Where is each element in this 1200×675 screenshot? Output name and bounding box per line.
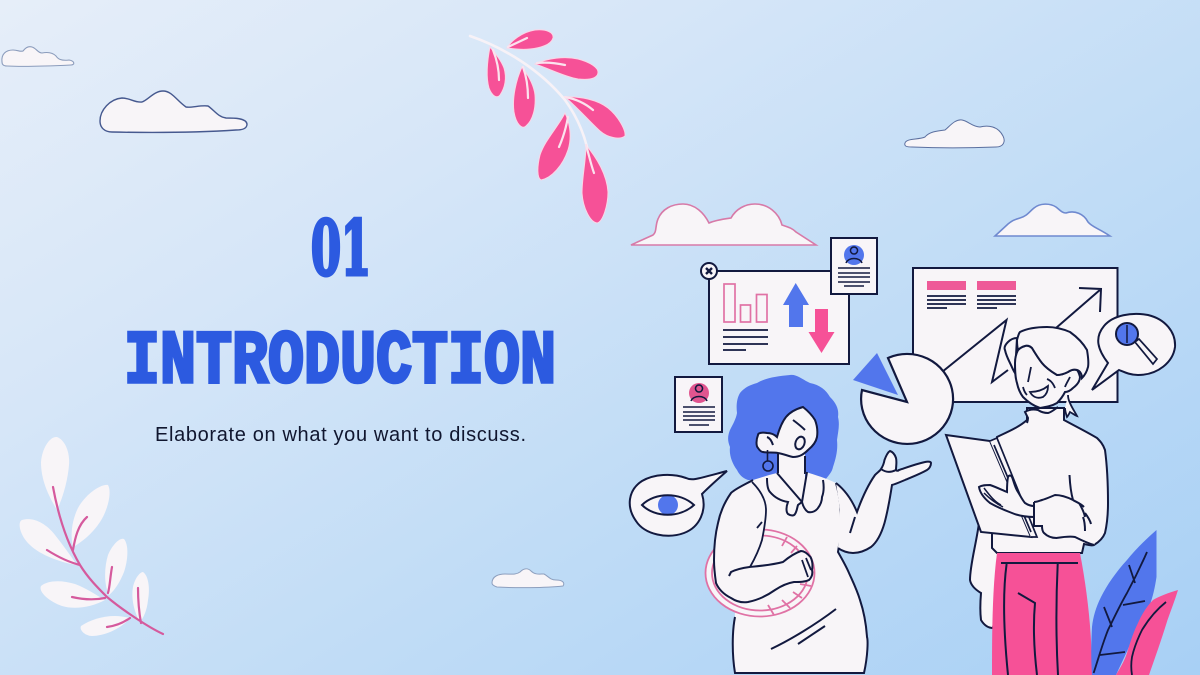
book — [946, 435, 1031, 537]
left hair tuft — [1005, 338, 1017, 373]
raised arm and hand — [836, 451, 931, 553]
panel: growth chart card — [913, 268, 1118, 402]
person: woman — [706, 375, 931, 673]
cloud: large top left — [100, 91, 247, 132]
collar — [1025, 407, 1058, 423]
back arm — [970, 520, 1005, 628]
growth arrow — [942, 288, 1101, 382]
arm with fist — [714, 480, 812, 602]
pants — [992, 553, 1092, 675]
head — [1015, 346, 1080, 408]
arrow down — [808, 309, 834, 353]
plant: pink leaf — [1116, 590, 1178, 675]
cloud: small top left — [2, 47, 74, 66]
close button — [701, 263, 717, 279]
speech bubble: eye — [630, 471, 727, 536]
neck and face — [777, 450, 805, 502]
bars — [724, 284, 767, 322]
section number: 01 — [311, 204, 371, 292]
profile card left — [675, 377, 722, 432]
torso — [992, 408, 1108, 553]
arrow up — [783, 283, 809, 327]
cloud: bottom centre small — [492, 569, 564, 588]
pie chart — [853, 353, 953, 444]
profile card top — [831, 238, 877, 294]
sprig: white leaves bottom left — [20, 437, 163, 636]
belly lines — [771, 609, 836, 649]
text lines — [723, 330, 768, 350]
face details — [1023, 367, 1070, 395]
cloud: top right small — [905, 120, 1004, 148]
panel: bar chart card — [701, 263, 849, 364]
subtitle: Elaborate on what you want to discuss. — [155, 424, 526, 446]
right sleeve and fist — [1034, 495, 1100, 545]
cloud: pink outline — [631, 204, 816, 245]
hair — [1017, 327, 1088, 378]
cloud: blue outline — [995, 204, 1110, 236]
plant: blue leaf — [1091, 530, 1156, 675]
speech bubble: magnifier — [1092, 314, 1175, 390]
hair — [728, 375, 839, 480]
hair strand — [1065, 395, 1077, 417]
left hand — [979, 476, 1034, 517]
title: INTRODUCTION — [124, 320, 556, 405]
person: man — [946, 327, 1108, 675]
coin ring — [706, 530, 814, 616]
collar — [767, 472, 824, 516]
dress body — [731, 472, 868, 673]
sprig: pink leaves top — [470, 30, 625, 223]
